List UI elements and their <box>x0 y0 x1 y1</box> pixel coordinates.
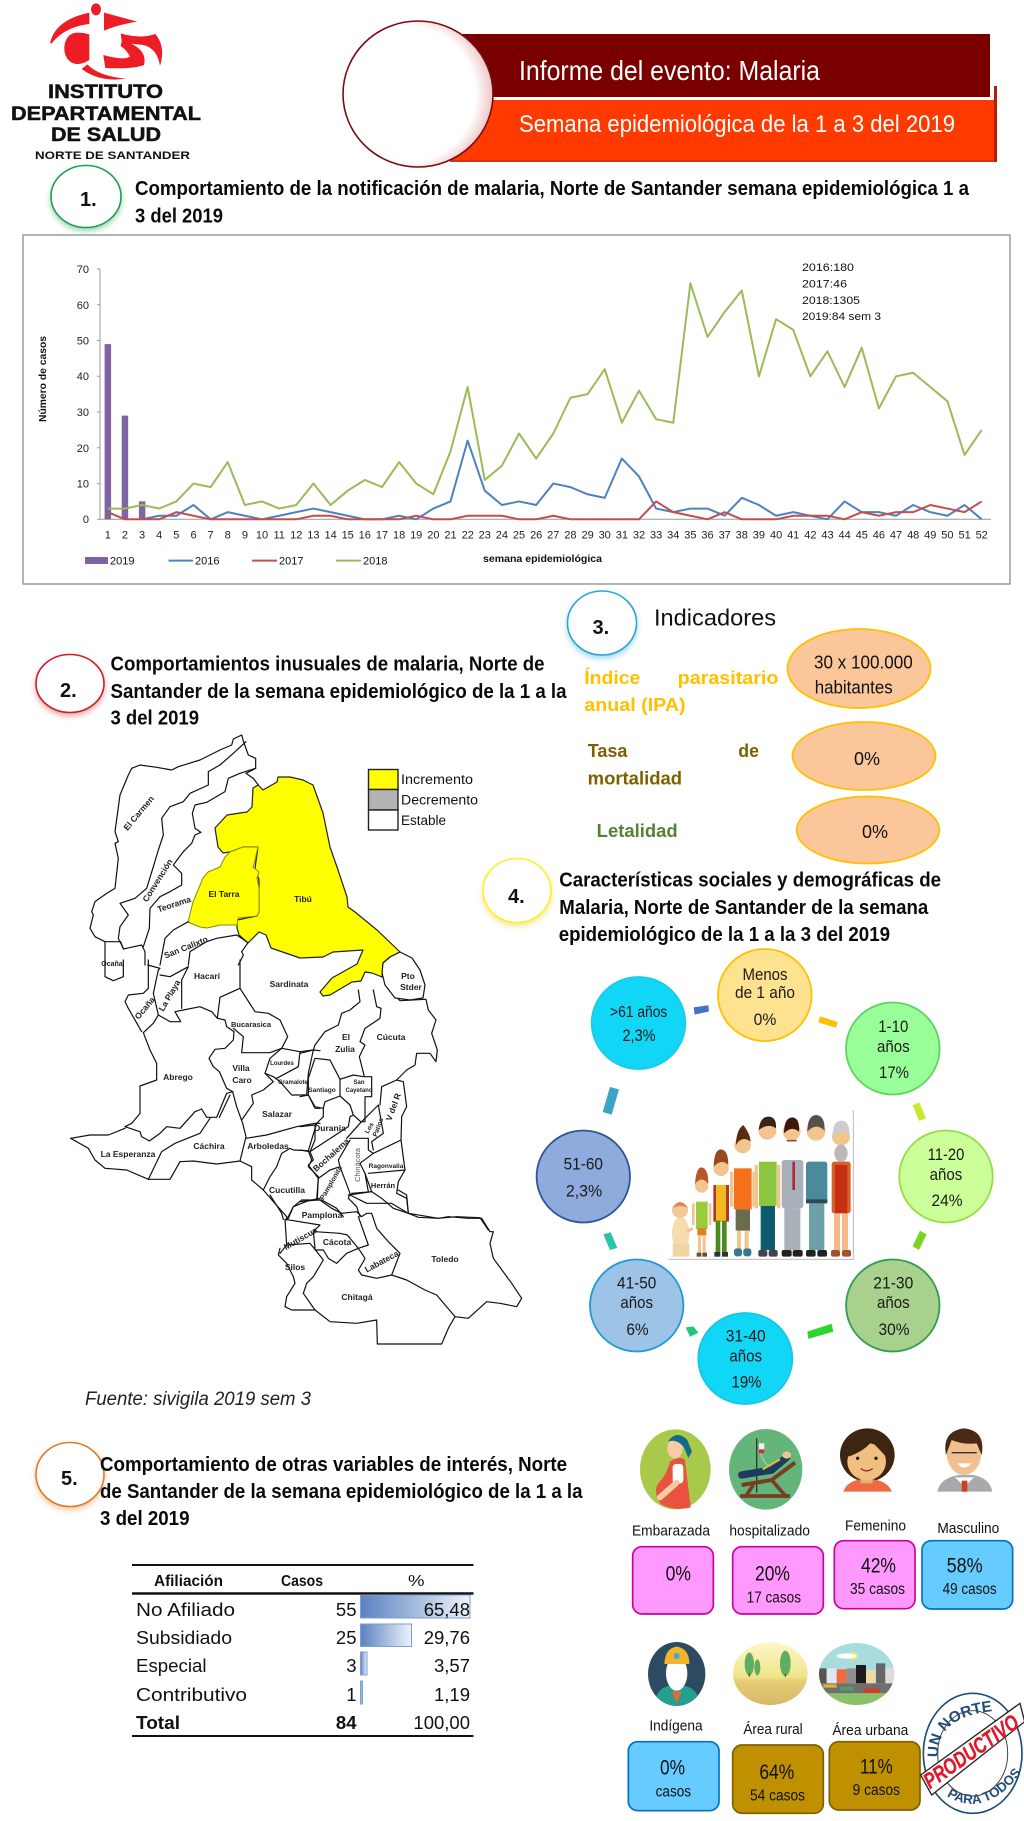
section 3 number badge <box>568 591 636 655</box>
mortality label: mortalidad <box>588 768 682 788</box>
table header: Casos <box>281 1573 323 1590</box>
age: 21-30 años: años <box>877 1293 910 1312</box>
municipality labels: Sardinata <box>270 979 309 989</box>
logo text: DE SALUD <box>51 125 161 146</box>
x axis week labels: 26 <box>530 530 542 542</box>
x axis week labels: 6 <box>190 530 197 542</box>
age: 1-10 años <box>846 1002 940 1094</box>
label: embarazada <box>632 1524 713 1614</box>
age: 51-60: 51-60 <box>564 1154 603 1174</box>
x axis week labels: 31 <box>616 530 628 542</box>
x axis week labels: 34 <box>667 530 679 542</box>
municipality labels: Villa <box>232 1063 250 1073</box>
municipality labels: La Playa <box>156 978 182 1013</box>
section 3 number badge: 3. <box>592 617 609 639</box>
municipality labels: Tibú <box>294 894 312 904</box>
table rows: 1,19 <box>434 1684 470 1705</box>
x axis week labels: 38 <box>736 530 748 542</box>
age: 41-50 años: 6% <box>626 1320 649 1339</box>
age: 1-10 años: años <box>877 1037 910 1056</box>
icon: hospitalizado <box>729 1429 802 1510</box>
x axis week labels: 2 <box>122 530 128 542</box>
teen <box>732 1125 754 1256</box>
line 2016 <box>142 441 982 519</box>
map borders centre west <box>71 960 320 1220</box>
municipality labels: Hacarí <box>194 971 221 981</box>
IPA value: habitantes <box>815 678 893 698</box>
table rows: 84 <box>336 1712 357 1733</box>
table rows: Especial <box>136 1655 206 1676</box>
x axis week labels: 25 <box>513 530 525 542</box>
y axis: 10 <box>77 478 89 490</box>
Puerto Santander border <box>382 952 425 1000</box>
x axis week labels: 18 <box>393 530 405 542</box>
connectors <box>603 1005 927 1339</box>
x axis week labels: 45 <box>856 530 868 542</box>
section 1 heading <box>135 178 970 228</box>
x axis week labels: 21 <box>444 530 457 542</box>
label: area rural: 64% <box>759 1760 794 1784</box>
map legend: Estable <box>401 813 446 828</box>
icon: ds red emblem <box>50 3 162 80</box>
x axis week labels: 46 <box>873 530 885 542</box>
table rows: 65,48 <box>424 1599 470 1620</box>
x axis title: semana epidemiológica <box>483 553 602 565</box>
chart legend: 2019 <box>110 556 134 568</box>
municipality labels: Stder <box>400 982 423 992</box>
label: indigena: Indígena <box>649 1719 703 1735</box>
municipality labels: El Carmen <box>121 794 156 832</box>
label: masculino: 58% <box>947 1554 983 1578</box>
y axis: 20 <box>77 443 89 455</box>
section 1 heading: Comportamiento de la notificación de malaria, Norte de Santander semana epidemiológica 1 a <box>135 178 970 200</box>
municipality labels: Zulia <box>335 1044 355 1054</box>
label: embarazada: Embarazada <box>632 1524 711 1540</box>
y axis: 60 <box>77 300 89 312</box>
municipality labels: Pamplonita <box>319 1165 344 1201</box>
header banner <box>343 21 997 167</box>
municipality labels: San <box>353 1080 365 1086</box>
x axis week labels: 1 <box>105 530 111 542</box>
age: 11-20 años <box>899 1130 993 1222</box>
x axis week labels: 10 <box>256 530 268 542</box>
municipality labels: Toledo <box>431 1254 459 1264</box>
label: hospitalizado: 20% <box>755 1561 790 1585</box>
section 4 heading: Características sociales y demográficas de <box>559 870 941 892</box>
table rows: 3,57 <box>434 1655 470 1676</box>
x axis week labels: 36 <box>701 530 714 542</box>
x axis week labels: 27 <box>547 530 559 542</box>
section 4 number badge: 4. <box>508 886 525 908</box>
middle aged man <box>806 1115 827 1257</box>
municipality labels: Ocaña <box>133 995 157 1021</box>
municipality labels: Arboledas <box>247 1141 289 1151</box>
x axis week labels: 28 <box>564 530 577 542</box>
table header <box>154 1573 424 1590</box>
y axis: 0 <box>83 514 89 526</box>
municipality labels: El Tarra <box>208 889 240 899</box>
bars 2019 <box>105 344 145 519</box>
x axis week labels: 37 <box>719 530 731 542</box>
y axis: 70 <box>77 264 89 276</box>
municipality labels: Teorama <box>156 894 192 914</box>
x axis week labels: 8 <box>225 530 231 542</box>
x axis week labels: 11 <box>273 530 285 542</box>
y axis: 40 <box>77 371 89 383</box>
x axis week labels: 12 <box>290 530 302 542</box>
table rows: 100,00 <box>413 1712 470 1733</box>
municipality labels: Mutiscua <box>282 1225 319 1252</box>
municipality labels: Chitagá <box>341 1292 373 1302</box>
map: municipios Norte de Santander <box>71 735 522 1344</box>
municipality labels: San Calixto <box>163 934 209 961</box>
municipality labels: Cucutilla <box>269 1185 305 1195</box>
table rows: 55 <box>336 1599 356 1620</box>
chart legend: 2016 <box>195 556 219 568</box>
icon: masculino <box>937 1428 992 1492</box>
IPA label <box>584 667 778 715</box>
table rows: 3 <box>346 1655 356 1676</box>
age: menos de 1 año: de 1 año <box>735 983 795 1002</box>
age: 41-50 años: años <box>620 1293 653 1312</box>
age: mayor de 61 años <box>592 977 685 1069</box>
table rows <box>136 1599 470 1733</box>
y axis: 30 <box>77 407 89 419</box>
table rows: No Afiliado <box>136 1599 235 1620</box>
municipality labels <box>101 794 459 1302</box>
age: menos de 1 año: 0% <box>754 1010 776 1029</box>
municipality labels: Silos <box>285 1262 305 1272</box>
mortality label <box>588 741 759 788</box>
x axis week labels: 30 <box>599 530 611 542</box>
section 5 number badge <box>36 1442 104 1506</box>
x axis week labels: 16 <box>359 530 371 542</box>
section 2 heading: Santander de la semana epidemiológico de la 1 a la <box>110 681 567 703</box>
section 5 heading: Comportamiento de otras variables de interés, Norte <box>100 1454 567 1476</box>
x axis week labels: 35 <box>684 530 697 542</box>
x axis week labels: 23 <box>479 530 491 542</box>
section 2 heading: 3 del 2019 <box>110 708 199 730</box>
age: 21-30 años <box>846 1260 940 1352</box>
mortality label: de <box>738 741 759 761</box>
section 5 heading: de Santander de la semana epidemiológico de la 1 a la <box>100 1481 583 1503</box>
chart legend: 2017 <box>279 556 303 568</box>
cycle diagram: grupos de edad <box>537 949 993 1404</box>
municipality labels: La Esperanza <box>101 1149 156 1159</box>
label: hospitalizado <box>729 1524 823 1614</box>
label: embarazada: 0% <box>666 1561 691 1585</box>
header subtitle: Semana epidemiológica de la 1 a 3 del 2019 <box>519 111 955 138</box>
age: 41-50 años <box>590 1260 683 1352</box>
municipality labels: Los <box>364 1121 376 1135</box>
logo text: DEPARTAMENTAL <box>11 104 201 125</box>
municipality labels: Pto <box>401 971 415 981</box>
label: femenino: 35 casos <box>850 1581 905 1598</box>
icon: indigena <box>648 1642 705 1707</box>
source note: Fuente: sivigila 2019 sem 3 <box>85 1389 311 1410</box>
x axis week labels: 50 <box>941 530 954 542</box>
municipality labels: Cayetano <box>345 1088 373 1094</box>
x axis week labels: 15 <box>342 530 354 542</box>
age: mayor de 61 años: 2,3% <box>622 1026 656 1045</box>
municipality labels: Pamplona <box>302 1210 343 1220</box>
logo text: NORTE DE SANTANDER <box>35 150 190 162</box>
chart legend: 2018 <box>363 556 387 568</box>
x axis week labels: 29 <box>581 530 594 542</box>
line chart: notificacion de malaria <box>23 235 1010 584</box>
map legend: Incremento <box>401 772 473 787</box>
section 1 number badge <box>51 166 121 228</box>
panel: indicadores <box>584 629 939 864</box>
table header: Afiliación <box>154 1573 223 1590</box>
section 2 number badge: 2. <box>60 680 77 702</box>
map borders south <box>270 1190 522 1344</box>
age: mayor de 61 años: >61 años <box>610 1004 667 1021</box>
IPA label: parasitario <box>678 668 778 688</box>
x axis week labels: 47 <box>890 530 902 542</box>
section 4 number badge <box>483 858 551 922</box>
illustration: family of ages <box>668 1110 853 1259</box>
child <box>693 1167 710 1257</box>
label: indigena: casos <box>656 1784 691 1801</box>
x axis week labels: 40 <box>770 530 782 542</box>
label: indigena <box>628 1719 719 1811</box>
y axis <box>77 264 991 526</box>
line 2018 <box>108 283 982 509</box>
municipality labels: Santiago <box>308 1087 336 1094</box>
x axis week labels: 44 <box>838 530 851 542</box>
age: menos de 1 año <box>718 949 812 1041</box>
label: femenino: 42% <box>861 1554 896 1578</box>
municipality labels: Lourdes <box>270 1061 294 1067</box>
age: 21-30 años: 21-30 <box>873 1274 913 1292</box>
section 1 number badge: 1. <box>80 189 97 211</box>
x axis week labels: 7 <box>208 530 214 542</box>
Tibu highlighted <box>215 777 400 996</box>
municipality labels: El <box>342 1032 350 1042</box>
x axis week labels: 51 <box>958 530 971 542</box>
age: 31-40 años: 31-40 <box>726 1326 766 1346</box>
municipality labels: Cúcuta <box>377 1032 406 1042</box>
totals annotation: 2016:180 <box>802 262 854 274</box>
label: hospitalizado: hospitalizado <box>729 1524 810 1540</box>
age: 41-50 años: 41-50 <box>617 1274 656 1292</box>
age: 1-10 años: 17% <box>879 1063 909 1082</box>
age: 31-40 años: 19% <box>732 1372 762 1392</box>
label: masculino: Masculino <box>937 1521 999 1537</box>
label: area rural <box>733 1721 823 1813</box>
IPA value <box>788 629 930 708</box>
line 2017 <box>108 501 982 519</box>
mortality value: 0% <box>854 749 880 769</box>
x axis week labels: 52 <box>976 530 988 542</box>
panel: otras variables <box>628 1428 1024 1814</box>
age: 31-40 años <box>698 1313 792 1404</box>
age: 11-20 años: años <box>930 1165 962 1184</box>
age: 51-60 <box>537 1130 630 1222</box>
municipality labels: V del R <box>384 1092 403 1122</box>
table rows: Total <box>136 1712 180 1733</box>
x axis week labels: 43 <box>821 530 834 542</box>
logo text: INSTITUTO <box>48 82 163 103</box>
icon: femenino <box>840 1428 895 1492</box>
x axis week labels: 19 <box>410 530 422 542</box>
baby <box>672 1202 693 1257</box>
label: hospitalizado: 17 casos <box>747 1589 801 1606</box>
municipality labels: Bucarasica <box>231 1020 272 1029</box>
section 4 heading: Malaria, Norte de Santander de la semana <box>559 897 929 919</box>
totals annotation: 2017:46 <box>802 278 847 290</box>
municipality labels: Gramalote <box>278 1080 308 1086</box>
map borders centre east <box>300 990 488 1230</box>
El Tarra highlighted <box>188 847 259 928</box>
old man <box>831 1121 851 1257</box>
section 1 heading: 3 del 2019 <box>135 206 223 228</box>
section 5 number badge: 5. <box>61 1468 78 1490</box>
municipality labels: Durania <box>314 1123 346 1133</box>
x axis week labels <box>105 530 988 542</box>
table header: % <box>408 1573 424 1590</box>
x axis week labels: 33 <box>650 530 662 542</box>
label: area urbana: 11% <box>860 1754 893 1778</box>
totals annotation: 2018:1305 <box>802 295 860 307</box>
x axis week labels: 48 <box>907 530 919 542</box>
table rows: Contributivo <box>136 1684 247 1705</box>
x axis week labels: 22 <box>462 530 474 542</box>
x axis week labels: 5 <box>173 530 179 542</box>
x axis week labels: 3 <box>139 530 145 542</box>
age: 11-20 años: 11-20 <box>928 1145 964 1164</box>
icon: area urbana <box>817 1642 897 1707</box>
icon: embarazada <box>640 1429 711 1509</box>
x axis week labels: 20 <box>427 530 440 542</box>
label: area rural: Área rural <box>743 1721 803 1738</box>
map legend <box>368 770 478 830</box>
section 2 heading <box>110 654 567 730</box>
x axis week labels: 13 <box>307 530 320 542</box>
section 3 heading: Indicadores <box>654 604 776 630</box>
table rows: 29,76 <box>424 1627 470 1648</box>
age: 31-40 años: años <box>729 1346 762 1366</box>
label: area urbana: Área urbana <box>832 1722 909 1739</box>
section 2 heading: Comportamientos inusuales de malaria, Norte de <box>110 654 544 676</box>
municipality labels: Ocaña <box>101 961 123 968</box>
x axis week labels: 41 <box>787 530 799 542</box>
x axis week labels: 9 <box>242 530 248 542</box>
stamp: un norte productivo para todos: PARA TODOS <box>948 1768 1020 1804</box>
totals annotation <box>802 262 881 323</box>
IPA label: Índice <box>584 667 640 688</box>
lethality label: Letalidad <box>597 821 678 841</box>
section 4 heading: epidemiológico de la 1 a la 3 del 2019 <box>559 924 890 946</box>
data bars <box>360 1595 470 1704</box>
mortality label: Tasa <box>588 741 628 761</box>
label: area rural: 54 casos <box>750 1787 805 1804</box>
table rows: 1 <box>346 1684 356 1705</box>
x axis week labels: 39 <box>753 530 765 542</box>
table rows: Subsidiado <box>136 1627 232 1648</box>
municipality labels: Patios <box>372 1117 385 1138</box>
municipality labels: Ragonvalia <box>369 1163 404 1170</box>
IPA value: 30 x 100.000 <box>814 652 913 672</box>
municipality labels: Herrán <box>371 1181 396 1190</box>
section 4 heading <box>559 870 941 946</box>
label: area urbana: 9 casos <box>853 1782 900 1799</box>
lethality value <box>797 796 939 864</box>
age: 1-10 años: 1-10 <box>878 1017 908 1036</box>
label: femenino: Femenino <box>845 1518 906 1534</box>
municipality labels: Abrego <box>163 1072 193 1082</box>
label: masculino <box>922 1521 1013 1609</box>
lethality value: 0% <box>862 822 888 842</box>
x axis week labels: 32 <box>633 530 645 542</box>
y axis title: Número de casos <box>38 336 49 422</box>
table: afiliacion <box>132 1565 474 1736</box>
totals annotation: 2019:84 sem 3 <box>802 311 881 323</box>
icon: area rural <box>733 1642 808 1705</box>
label: indigena: 0% <box>660 1755 685 1779</box>
adult in suit <box>782 1117 803 1257</box>
municipality labels: Cáchira <box>193 1141 225 1151</box>
young man <box>756 1117 779 1257</box>
age: 51-60: 2,3% <box>566 1182 602 1200</box>
section 5 heading: 3 del 2019 <box>100 1508 190 1530</box>
y axis: 50 <box>77 336 89 348</box>
municipality labels: Caro <box>232 1075 252 1085</box>
x axis week labels: 4 <box>156 530 162 542</box>
municipality labels: Convención <box>140 857 175 904</box>
map borders north <box>90 735 258 965</box>
series lines <box>108 283 982 519</box>
x axis week labels: 49 <box>924 530 936 542</box>
municipality labels: Chinácota <box>353 1147 362 1182</box>
x axis week labels: 24 <box>496 530 508 542</box>
municipality labels: Salazar <box>262 1109 293 1119</box>
x axis week labels: 42 <box>804 530 817 542</box>
header title: Informe del evento: Malaria <box>519 55 820 86</box>
label: femenino <box>834 1518 915 1609</box>
IPA label: anual (IPA) <box>584 695 686 715</box>
municipality labels: Labateca <box>363 1248 400 1274</box>
section 5 heading <box>100 1454 583 1530</box>
x axis week labels: 14 <box>324 530 337 542</box>
municipality labels: Bochalema <box>311 1136 351 1174</box>
table rows: 25 <box>336 1627 356 1648</box>
age: 11-20 años: 24% <box>932 1191 962 1210</box>
logo text <box>11 82 201 162</box>
map legend: Decremento <box>401 792 478 808</box>
age: 21-30 años: 30% <box>878 1320 910 1339</box>
logo: Instituto Departamental de Salud <box>11 3 201 162</box>
mortality value <box>792 722 936 790</box>
chart legend <box>85 556 387 568</box>
section 2 number badge <box>36 654 104 712</box>
x axis week labels: 17 <box>376 530 388 542</box>
age: menos de 1 año: Menos <box>742 965 788 984</box>
municipality labels: Cácota <box>323 1237 351 1247</box>
label: area urbana <box>829 1722 920 1810</box>
boy with backpack <box>713 1149 729 1257</box>
label: masculino: 49 casos <box>943 1581 997 1598</box>
stamp: un norte productivo para todos: UN NORTE <box>928 1700 992 1756</box>
